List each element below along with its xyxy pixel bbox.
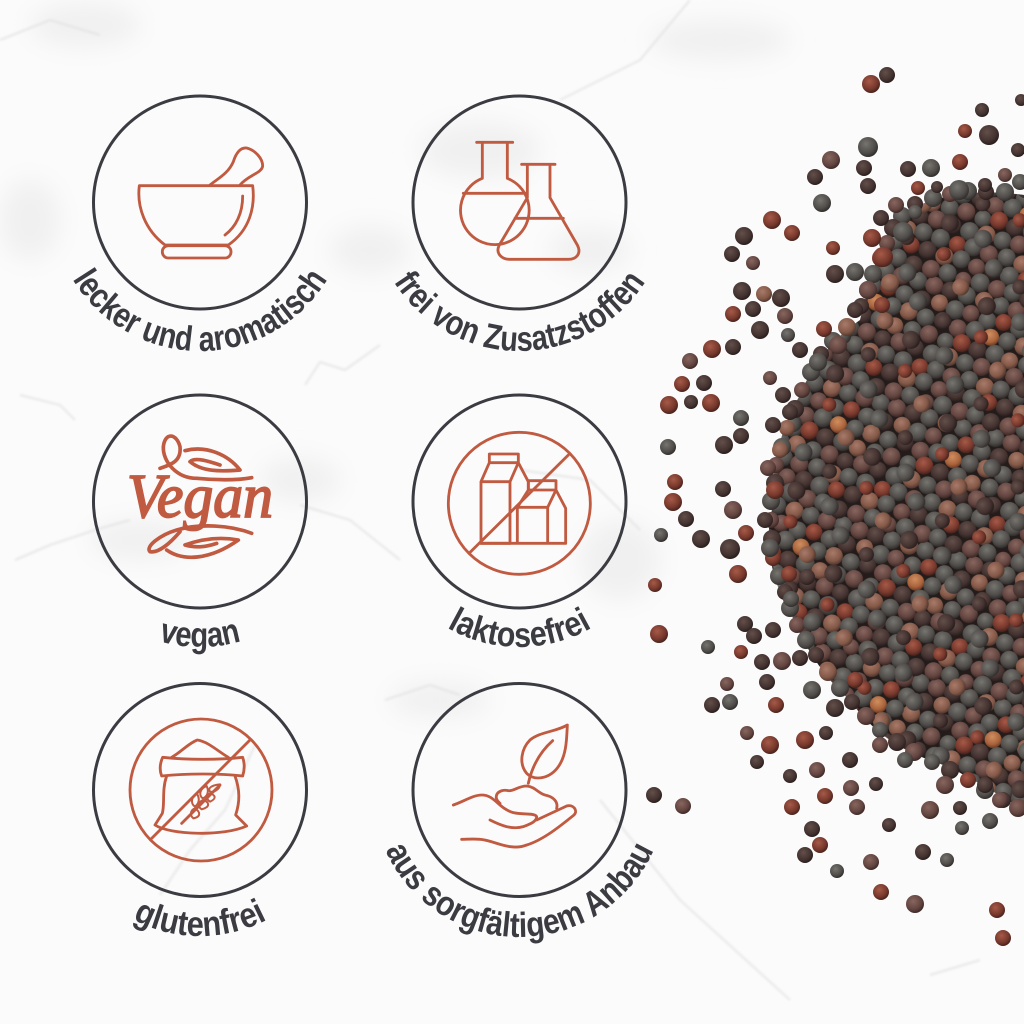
icon: crossed-out milk cartons — [448, 432, 590, 574]
seed pile — [646, 67, 1024, 946]
label: glutenfrei — [133, 898, 266, 936]
ring — [94, 684, 306, 896]
edge seeds — [762, 182, 1024, 817]
badge: glutenfrei — [92, 682, 308, 936]
label: vegan — [162, 623, 240, 654]
lettering: Vegan — [127, 463, 273, 531]
label: aus sorgfältigem Anbau — [386, 843, 653, 944]
icon: vegan lettering with leaves — [127, 436, 273, 557]
label: frei von Zusatzstoffen — [395, 271, 645, 352]
badge: laktosefrei — [412, 394, 628, 648]
dense seed core — [769, 192, 1024, 810]
icon: crossed-out flour sack with wheat — [130, 719, 272, 861]
ring — [413, 395, 626, 608]
ring — [94, 395, 306, 608]
leaf flourishes — [149, 436, 252, 557]
label: laktosefrei — [448, 606, 590, 648]
badge: vegan — [92, 394, 308, 654]
ring — [94, 96, 306, 309]
badge: frei von Zusatzstoffen — [395, 94, 645, 352]
icon: mortar and pestle — [139, 148, 263, 258]
badge: aus sorgfältigem Anbau — [386, 682, 653, 944]
icon: hand holding seedling — [453, 725, 576, 847]
ring — [413, 684, 626, 896]
icon: laboratory flasks — [460, 142, 579, 259]
label: lecker und aromatisch — [74, 267, 327, 352]
scattered seeds — [646, 67, 1024, 946]
badge: lecker und aromatisch — [74, 94, 327, 352]
ring — [413, 96, 626, 309]
